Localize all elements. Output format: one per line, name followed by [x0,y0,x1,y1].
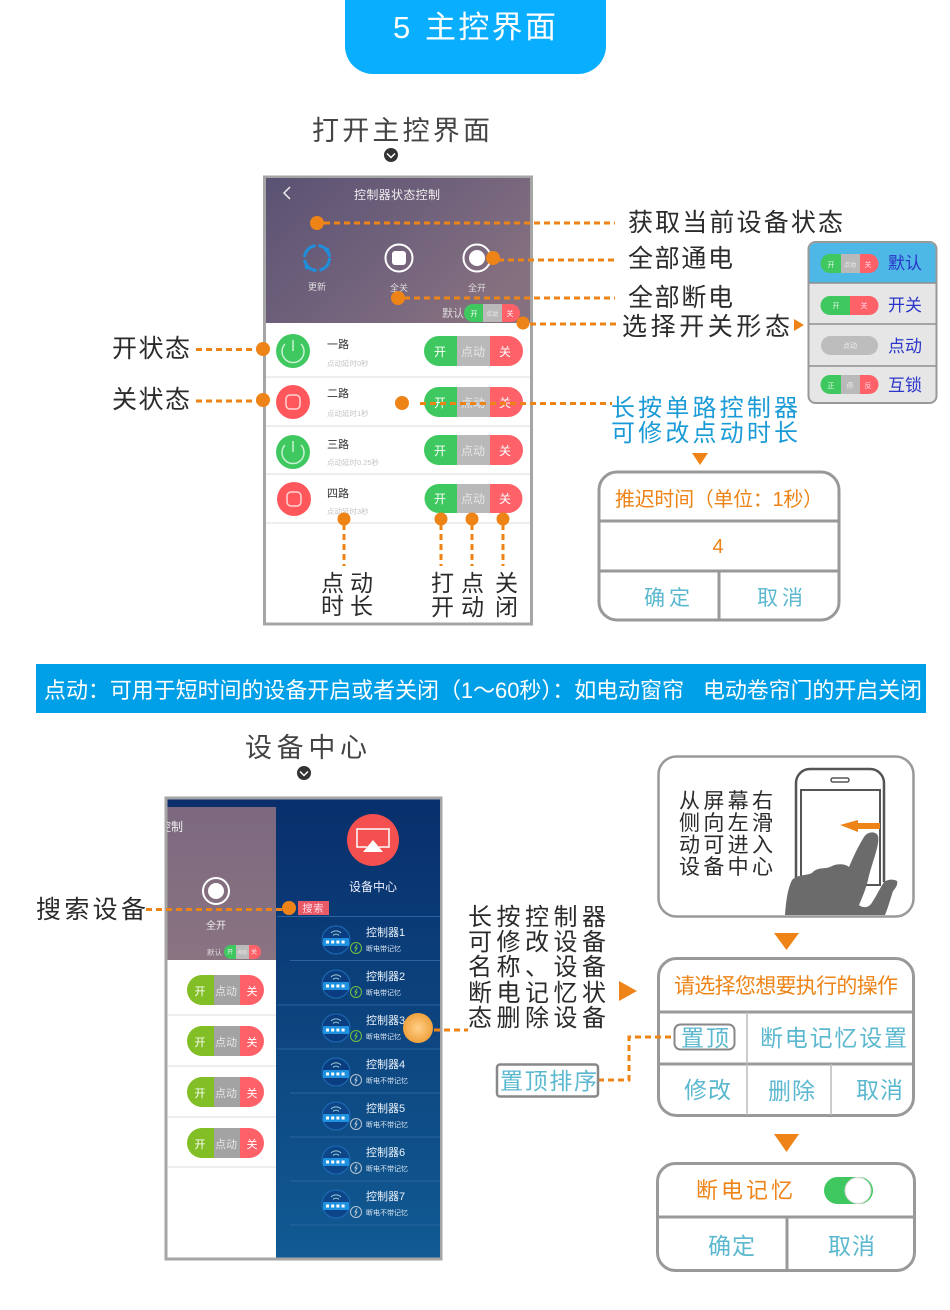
dimmed header: 开 [227,949,233,956]
row 3: 点动 [461,444,485,458]
phone header: 控制器状态控制 [354,188,440,202]
form: default: 开 [828,261,834,269]
dialog: choose action: 修改 [684,1077,731,1103]
callout: long press controller: 名称、设备 [468,954,606,981]
callout: turn on: 打 [431,570,454,596]
device 3: 断电带记忆 [366,1032,401,1041]
callout: jog duration: 时长 [321,593,373,619]
panel: swipe instruction: 从屏幕右 [679,790,773,813]
arrow: down [774,1134,799,1152]
callout: jog [461,512,484,620]
row 3 [276,435,523,469]
form: default: 点动 [844,261,856,269]
dialog: power-off memory [658,1164,914,1270]
panel: swipe instruction [658,756,914,916]
title tab: 主控界面 [425,10,556,45]
pill 2 [187,1026,264,1056]
phone: device center screen [164,796,442,1260]
phone: device center screen: 设备中心 [349,879,397,894]
phone header: 更新 [308,281,326,292]
row 4: 关 [499,492,511,506]
row 2: 二路 [327,387,349,400]
row 3: 点动延时0.25秒 [327,457,380,467]
row 3: 关 [499,444,511,458]
row 3: 开 [434,444,446,458]
callout: long press single channel: 长按单路控制器 [611,395,798,422]
heading: device center: 设备中心 [245,733,367,763]
row 2: 开 [434,396,446,410]
phone header: 点动 [486,310,498,318]
callout: all off [391,284,733,312]
form: switch: 开关 [888,296,922,315]
panel: switch forms [808,242,936,403]
pill 3 [187,1077,264,1107]
callout: jog duration [321,512,373,619]
dialog: delay time: 确定 [644,587,690,610]
dimmed header: 点动 [237,949,247,956]
form: interlock: 反 [864,381,872,390]
row 1: 关 [499,345,511,359]
callout: on state [112,335,270,363]
row 2: 点动延时1秒 [327,408,369,418]
form: jog: 点动 [843,341,857,350]
device 3 [322,1013,405,1042]
form: default: 默认 [888,254,922,273]
row 4: 点动延时3秒 [327,506,369,516]
pill 2: 开 [194,1037,206,1049]
pill 4: 关 [246,1137,258,1151]
callout: on state: 开状态 [112,335,190,363]
title tab: 5 [393,10,412,45]
row dividers [266,377,530,523]
form: interlock: 正 [828,382,834,390]
callout: off state: 关状态 [112,386,190,414]
dimmed header [167,807,276,960]
dimmed header: 控制器状态控制 [99,820,183,834]
toggle switch [824,1177,873,1204]
callout: pin to top sort: 置顶排序 [500,1068,597,1094]
callout: long press controller [403,904,606,1043]
callout: turn on: 开 [431,594,454,620]
callout: all off: 全部断电 [628,284,733,312]
callout: close [495,512,518,620]
panel: swipe instruction: 设备中心 [679,856,773,879]
dialog: choose action: 断电记忆设置 [760,1025,907,1051]
pill 3: 点动 [215,1087,237,1100]
dimmed header: 全开 [206,919,226,932]
callout: long press single channel [395,395,798,465]
form: interlock: 互锁 [888,376,922,395]
dialog: power-off memory: 断电记忆 [696,1178,793,1203]
phone header: 全开 [468,282,486,293]
form: interlock: 停 [846,381,854,390]
pill 3: 开 [194,1088,206,1100]
device 4: 断电不带记忆 [366,1076,408,1085]
callout: long press single channel: 可修改点动时长 [611,420,798,447]
device 2: 断电带记忆 [366,988,401,997]
pill 3: 关 [246,1086,258,1100]
device 6: 控制器6 [366,1145,405,1159]
arrow: to action dialog [619,981,637,1001]
form: interlock [820,375,922,395]
form: switch: 开 [832,302,840,310]
callout: turn on [431,512,454,620]
phone: main control screen [264,177,532,624]
pill 1: 开 [194,986,206,998]
form: default: 关 [864,260,872,269]
callout: long press controller: 可修改设备 [468,929,606,956]
device 5: 断电不带记忆 [366,1120,408,1129]
panel: swipe instruction: 侧向左滑 [679,812,773,835]
row 1 [276,334,523,368]
pill 4 [187,1128,264,1158]
row 1: 开 [434,345,446,359]
dark device sidebar [276,800,440,1258]
device 1: 断电带记忆 [366,944,401,953]
device 7: 断电不带记忆 [366,1208,408,1217]
row 3: 三路 [327,438,349,451]
pill 1: 关 [246,984,258,998]
callout: jog: 动 [461,594,484,620]
callout: close: 闭 [495,594,518,620]
note banner: 点动：可用于短时间的设备开启或者关闭（1～60秒）：如电动窗帘 [44,678,684,703]
dialog: choose action: 取消 [856,1077,903,1103]
dialog: choose action [658,958,914,1116]
phone header: 默认 [442,307,464,320]
row 2: 点动 [461,396,485,410]
row 1: 一路 [327,338,349,351]
callout: search device [36,896,296,924]
callout: close: 关 [495,570,518,596]
device 5: 控制器5 [366,1101,405,1115]
pill 2: 点动 [215,1036,237,1049]
heading: open main control: 打开主控界面 [312,116,490,146]
dialog: choose action: 请选择您想要执行的操作 [674,975,898,998]
dialog: power-off memory: 确定 [708,1233,755,1259]
device 6: 断电不带记忆 [366,1164,408,1173]
search badge: 搜索 [302,902,324,915]
callout: off state [112,386,270,414]
note banner [36,664,926,713]
phone header: 开 [470,310,478,318]
heading: open main control [312,116,490,162]
device 1 [322,925,405,954]
device 3: 控制器3 [366,1013,405,1027]
callout: select switch form: 选择开关形态 [622,313,790,341]
phone header [266,178,530,323]
dialog: delay time [599,472,839,620]
form: jog [821,336,922,356]
dialog: delay time: 推迟时间（单位：1秒） [615,488,823,511]
dialog: delay time: 4 [712,536,724,558]
form: default [820,254,922,273]
callout: get device state [310,209,843,237]
row 2: 关 [499,396,511,410]
device 7 [322,1189,408,1218]
device 4 [322,1057,408,1086]
row 1: 点动 [461,345,485,359]
pill 4: 开 [194,1139,206,1151]
row 4 [277,482,522,516]
callout: jog duration: 点动 [321,570,373,596]
callout: all on [486,245,733,273]
device 1: 控制器1 [366,925,405,939]
device 7: 控制器7 [366,1189,405,1203]
row 4: 四路 [327,487,349,500]
callout: search device: 搜索设备 [36,896,146,924]
phone header: 关 [506,309,514,318]
dividers [168,1015,276,1167]
pill 1: 点动 [215,985,237,998]
pill 4: 点动 [215,1138,237,1151]
pill 2: 关 [246,1035,258,1049]
dialog: power-off memory: 取消 [828,1233,875,1259]
callout: all on: 全部通电 [628,245,733,273]
device 6 [322,1145,408,1174]
arrow: down [774,933,799,950]
pill 1 [187,975,264,1005]
pin to top button: 置顶 [681,1025,729,1051]
form: switch: 关 [860,301,868,310]
device 4: 控制器4 [366,1057,405,1071]
callout: get device state: 获取当前设备状态 [628,209,843,237]
icon: airplay [347,814,399,866]
heading: device center [245,733,367,780]
dimmed header: 默认 [207,947,222,957]
callout: select switch form [516,313,804,341]
row 4: 开 [434,492,446,506]
dimmed header: 关 [251,948,257,956]
callout: jog: 点 [461,570,484,596]
dialog: choose action: 删除 [768,1078,815,1104]
row 2 [276,385,523,419]
callout: long press controller: 态删除设备 [468,1005,606,1032]
device 5 [322,1101,408,1130]
title tab [345,0,606,74]
search badge [298,901,329,915]
form: switch [820,296,922,315]
form: jog: 点动 [888,337,922,356]
note banner: 电动卷帘门的开启关闭 [703,678,922,703]
callout: long press controller: 断电记忆状 [468,980,606,1007]
device 2: 控制器2 [366,969,405,983]
panel: swipe instruction: 动可进入 [679,834,773,857]
callout: long press controller: 长按控制器 [468,904,606,931]
dialog: delay time: 取消 [757,587,803,610]
row 1: 点动延时0秒 [327,358,369,368]
icon: phone and hand [785,769,897,915]
callout: pin to top sort [497,1037,674,1096]
row 4: 点动 [461,492,485,506]
phone header: 全关 [390,282,408,293]
device 2 [322,969,405,998]
